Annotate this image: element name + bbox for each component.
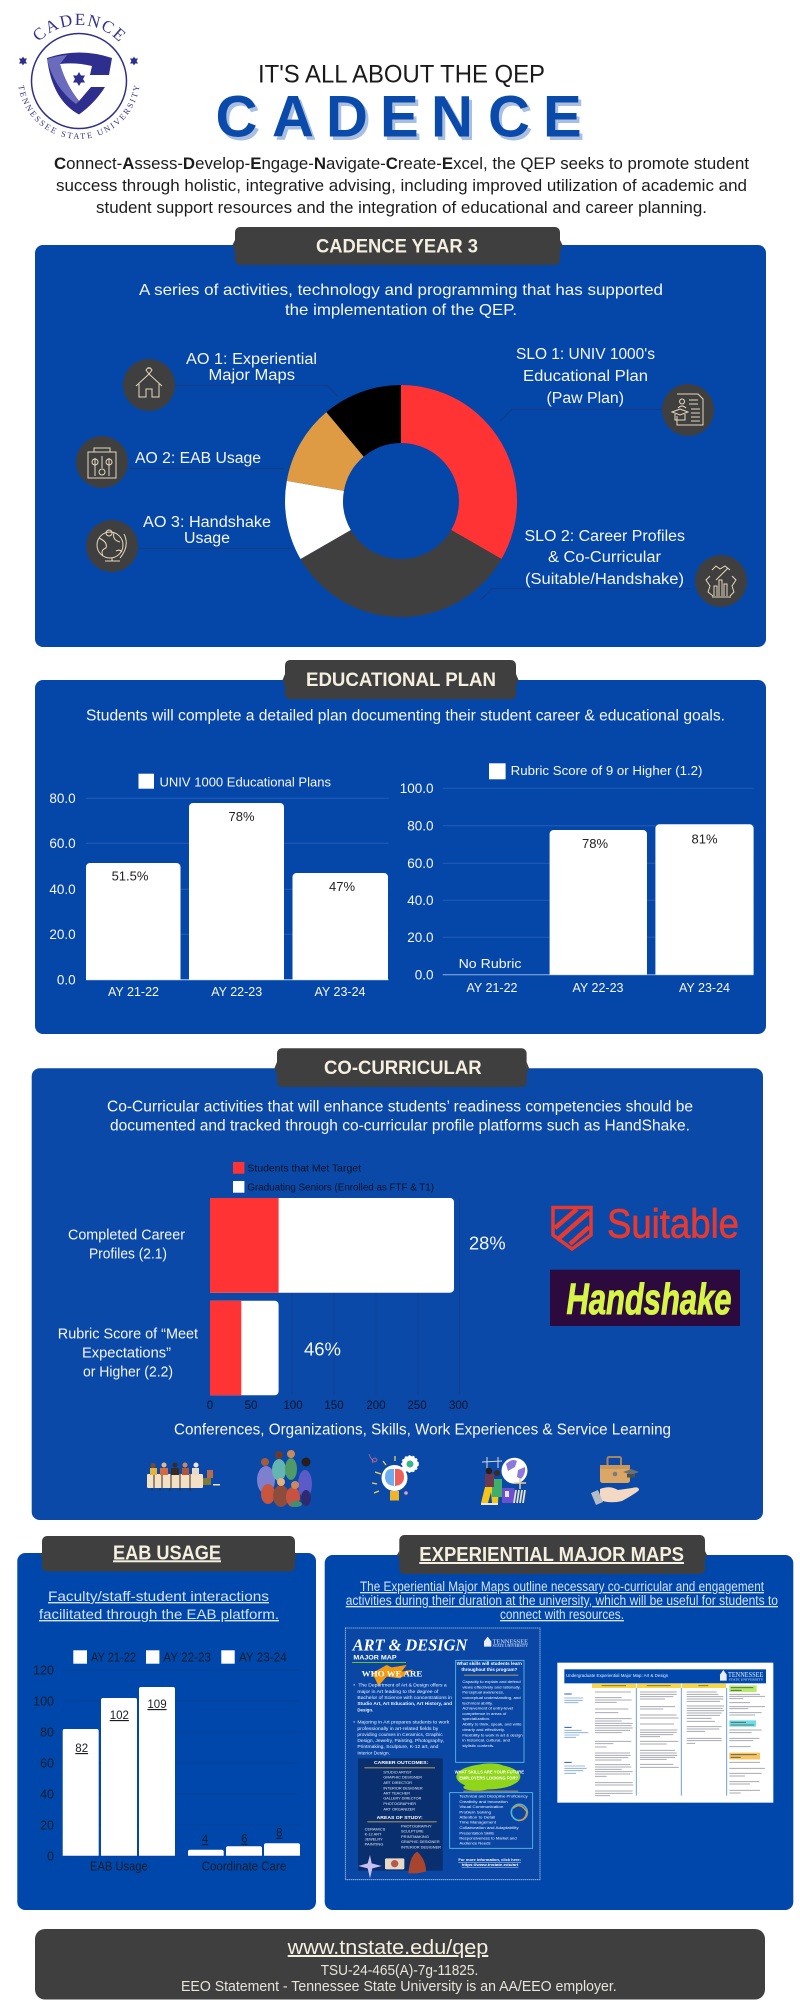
chart: EAB usage bars: 20 <box>40 1818 54 1832</box>
chart: EAB usage bars: AY 23-24 <box>239 1650 287 1664</box>
footer: website and EEO statement <box>35 1929 765 2000</box>
poster: Art and Design major map: K-12 ART <box>365 1832 382 1836</box>
icon: house <box>123 359 175 411</box>
panel: Educational Plan <box>35 660 766 1034</box>
chart: career profiles and rubric score bars: or Higher (2.2) <box>83 1364 173 1381</box>
poster: Art and Design major map: Printmaking, Sculpture, K-12 art, and <box>357 1744 439 1749</box>
intro paragraph: student support resources and the integration of educational and career planning. <box>96 199 707 217</box>
text: major maps description: connect with resources. <box>500 1607 624 1622</box>
chart: EAB usage bars: EAB Usage <box>90 1860 148 1874</box>
poster: Art and Design major map: conceptual understanding, and <box>462 1695 521 1700</box>
poster: Art and Design major map: AREAS OF STUDY: <box>377 1815 423 1820</box>
legend: Students that Met Target <box>247 1164 361 1175</box>
chart: Rubric Score of 9 or Higher: 0.0 <box>415 967 434 982</box>
label: SLO 2 Career Profiles and Co-Curricular: SLO 2: Career Profiles <box>524 528 685 545</box>
poster: Art and Design major map: Visual Communication <box>459 1804 503 1809</box>
poster: Art and Design major map: PHOTOGRAPHY <box>401 1824 432 1828</box>
chart: EAB usage bars: 40 <box>40 1788 54 1802</box>
poster: Art and Design major map: Creativity and Innovation <box>459 1799 508 1804</box>
poster: Art and Design major map: ART ORGANIZER <box>383 1807 415 1811</box>
chart: career profiles and rubric score bars: 0 <box>207 1400 213 1412</box>
poster: Art and Design major map: Attention to Detail <box>459 1814 495 1819</box>
poster: Art and Design major map: WHO WE ARE <box>362 1669 423 1679</box>
icon: world travel and books <box>481 1457 528 1505</box>
chart: UNIV 1000 Educational Plans: UNIV 1000 Educational Plans <box>160 774 331 789</box>
chart: EAB usage bars: 100 <box>33 1694 54 1708</box>
icon: lightbulb brain and gear <box>369 1454 418 1500</box>
chart: Rubric Score of 9 or Higher <box>400 763 754 995</box>
poster: Art and Design major map: clearly and effectively. <box>462 1727 505 1732</box>
logo: Handshake: Handshake <box>566 1275 732 1324</box>
document: undergraduate experiential major map <box>557 1663 773 1803</box>
chart: EAB usage bars: 6 <box>241 1834 248 1846</box>
chart: EAB usage bars: 60 <box>40 1756 54 1770</box>
title: CADENCE wordmark: CADENCE <box>216 84 582 150</box>
poster: Art and Design major map: CERAMICS <box>365 1827 386 1831</box>
chart: Rubric Score of 9 or Higher: 100.0 <box>400 781 434 796</box>
chart: UNIV 1000 Educational Plans: AY 22-23 <box>211 985 262 999</box>
poster: Art and Design major map: Responsiveness to Market and <box>459 1836 517 1841</box>
heading: Educational Plan: EDUCATIONAL PLAN <box>306 670 496 691</box>
icon: conference audience <box>147 1462 220 1491</box>
chart: EAB usage bars: 80 <box>40 1726 54 1740</box>
chart: career profiles and rubric score bars: Completed Career <box>68 1227 185 1244</box>
text: educational plan description: Students will complete a detailed plan documenting their student career & educational goals. <box>86 708 725 724</box>
poster: Art and Design major map: Design. <box>357 1707 373 1712</box>
chart: Rubric Score of 9 or Higher: AY 21-22 <box>467 981 518 995</box>
poster: Art and Design major map: Time Management <box>459 1820 497 1825</box>
label: AO 3 Handshake Usage <box>138 514 290 548</box>
label: SLO 2 Career Profiles and Co-Curricular: (Suitable/Handshake) <box>525 571 684 588</box>
label: AO 1 Experiential Major Maps: Major Maps <box>208 367 295 384</box>
logo: Suitable <box>553 1200 739 1249</box>
poster: Art and Design major map: INTERIOR DESIGNER <box>383 1786 423 1790</box>
poster: Art and Design major map: JEWELRY <box>365 1838 383 1842</box>
poster: Art and Design major map: INTERIOR DESIGNER <box>401 1845 441 1849</box>
chart: Rubric Score of 9 or Higher: 78% <box>582 836 608 851</box>
poster: Art and Design major map: Majoring in Art prepares students to work <box>357 1720 450 1725</box>
poster: Art and Design major map: ART DIRECTOR <box>383 1781 412 1785</box>
label: AO 3 Handshake Usage: AO 3: Handshake <box>143 514 271 531</box>
intro paragraph: success through holistic, integrative advising, including improved utilization of academic and <box>56 177 747 195</box>
footer: website and EEO statement: EEO Statement - Tennessee State University is an AA/EEO employer. <box>181 1979 617 1995</box>
title: CADENCE wordmark: CADENCE <box>218 88 585 153</box>
chart: career profiles and rubric score bars: 50 <box>245 1400 257 1412</box>
label: SLO 2 Career Profiles and Co-Curricular <box>480 528 690 600</box>
poster: Art and Design major map: stylistic contexts. <box>462 1743 494 1748</box>
chart: UNIV 1000 Educational Plans: 78% <box>228 809 255 824</box>
chart: UNIV 1000 Educational Plans: 60.0 <box>49 836 76 851</box>
panel: Cadence Year 3 <box>35 227 766 647</box>
poster: Art and Design major map: competence in areas of <box>462 1711 507 1716</box>
poster: Art and Design major map: Technical and Discipline Proficiency <box>459 1794 528 1799</box>
poster: Art and Design major map: Flexibility to work in art & design <box>462 1732 523 1737</box>
logo: CADENCE Tennessee State University seal: TENNESSEE STATE UNIVERSITY <box>18 84 140 139</box>
chart: EAB usage bars: AY 21-22 <box>91 1650 136 1664</box>
chart: EAB usage bars: 102 <box>110 1710 129 1722</box>
chart: Rubric Score of 9 or Higher: No Rubric <box>459 956 522 971</box>
chart: Rubric Score of 9 or Higher: 81% <box>691 831 718 846</box>
poster: Art and Design major map: The Department of Art & Design offers a <box>358 1683 447 1688</box>
chart: UNIV 1000 Educational Plans <box>49 774 388 999</box>
chart: UNIV 1000 Educational Plans: 47% <box>329 879 355 894</box>
text: panel description <box>139 282 663 319</box>
legend <box>233 1162 434 1194</box>
text: major maps description <box>346 1579 778 1622</box>
heading: Experiential Major Maps <box>397 1535 707 1574</box>
heading: Cadence Year 3 <box>232 227 562 265</box>
chart: EAB usage bars: 0 <box>47 1850 54 1864</box>
poster: Art and Design major map: Ability to think, speak, and write <box>462 1722 522 1727</box>
chart: career profiles and rubric score bars <box>58 1162 506 1412</box>
poster: Art and Design major map: CAREER OUTCOMES: <box>374 1760 429 1765</box>
poster: Art and Design major map: views effectively and rationally. <box>462 1684 521 1689</box>
poster: Art and Design major map: STATE UNIVERSITY <box>493 1643 528 1648</box>
legend: Graduating Seniors (Enrolled as FTF & T1) <box>247 1182 434 1194</box>
document: undergraduate experiential major map: Undergraduate Experiential Major Map: Art & Design <box>566 1673 669 1678</box>
chart: Rubric Score of 9 or Higher: Rubric Score of 9 or Higher (1.2) <box>511 763 702 778</box>
chart: EAB usage bars: AY 22-23 <box>163 1650 211 1664</box>
icon: group of students <box>257 1450 312 1507</box>
poster: Art and Design major map: PAINTING <box>365 1843 383 1847</box>
poster: Art and Design major map: GRAPHIC DESIGNER <box>401 1840 440 1844</box>
poster: Art and Design major map: WHAT SKILLS ARE YOUR FUTURE <box>455 1770 524 1775</box>
label: SLO 1 Educational Plan: (Paw Plan) <box>546 390 624 407</box>
text: EAB description: facilitated through the EAB platform. <box>39 1606 279 1622</box>
poster: Art and Design major map: https://www.tnstate.edu/art <box>462 1862 519 1867</box>
heading: Co-Curricular: CO-CURRICULAR <box>324 1058 482 1079</box>
poster: Art and Design major map: TENNESSEE <box>493 1638 528 1645</box>
chart: career profiles and rubric score bars: 28% <box>469 1233 506 1253</box>
chart: career profiles and rubric score bars: Expectations” <box>82 1345 171 1362</box>
icon: gear with bar chart <box>695 555 747 607</box>
chart: EAB usage bars: 82 <box>75 1743 88 1755</box>
logo: CADENCE Tennessee State University seal: CADENCE <box>34 14 126 42</box>
chart: UNIV 1000 Educational Plans: AY 21-22 <box>108 985 159 999</box>
text: EAB description <box>39 1588 279 1622</box>
chart: donut of outcomes <box>285 385 517 617</box>
chart: UNIV 1000 Educational Plans: 40.0 <box>49 882 76 897</box>
text: panel description: A series of activities, technology and programming that has supported <box>139 282 663 299</box>
heading: Co-Curricular <box>274 1048 529 1087</box>
label: AO 1 Experiential Major Maps <box>172 351 338 397</box>
chart: career profiles and rubric score bars: 46% <box>304 1340 341 1360</box>
footer: website and EEO statement: TSU-24-465(A)-7g-11825. <box>321 1963 478 1979</box>
heading: EAB Usage <box>40 1536 297 1572</box>
icon: globe <box>86 520 138 572</box>
poster: Art and Design major map: professionally in art-related fields by <box>357 1726 439 1731</box>
poster: Art and Design major map: technical ability. <box>462 1700 493 1705</box>
text: EAB description: Faculty/staff-student interactions <box>48 1588 269 1604</box>
poster: Art and Design major map: PHOTOGRAPHER <box>383 1802 416 1806</box>
poster: Art and Design major map: Capacity to explain and defend <box>462 1679 521 1684</box>
text: activities caption: Conferences, Organizations, Skills, Work Experiences & Service Learning <box>174 1422 671 1438</box>
chart: Rubric Score of 9 or Higher: 40.0 <box>407 893 434 908</box>
label: SLO 1 Educational Plan: SLO 1: UNIV 1000's <box>516 346 655 363</box>
chart: career profiles and rubric score bars: 150 <box>324 1400 344 1412</box>
chart: career profiles and rubric score bars: 250 <box>407 1400 427 1412</box>
intro paragraph <box>54 155 749 217</box>
poster: Art and Design major map: PRINTMAKING <box>401 1835 429 1839</box>
poster: Art and Design major map: Studio Art, Art Education, Art History, and <box>357 1701 452 1706</box>
poster: Art and Design major map: in historical, cultural, and <box>462 1738 510 1743</box>
poster: Art and Design major map: SCULPTURE <box>401 1830 424 1834</box>
chart: EAB usage bars: 8 <box>276 1828 283 1840</box>
poster: Art and Design major map: GALLERY DIRECTOR <box>383 1797 422 1801</box>
chart: Rubric Score of 9 or Higher: AY 22-23 <box>573 981 624 995</box>
chart: career profiles and rubric score bars: Rubric Score of “Meet <box>58 1326 199 1343</box>
title: It's all about the QEP: IT'S ALL ABOUT THE QEP <box>258 60 545 88</box>
chart: career profiles and rubric score bars: 200 <box>366 1400 386 1412</box>
label: SLO 2 Career Profiles and Co-Curricular: & Co-Curricular <box>548 549 661 566</box>
chart: UNIV 1000 Educational Plans: 51.5% <box>112 868 149 883</box>
poster: Art and Design major map: Interior Design. <box>357 1750 390 1755</box>
label: SLO 1 Educational Plan <box>500 346 665 421</box>
heading: Experiential Major Maps: EXPERIENTIAL MAJOR MAPS <box>419 1544 684 1566</box>
text: co-curricular description: documented and tracked through co-curricular profile platforms such as HandShake. <box>110 1118 690 1134</box>
chart: UNIV 1000 Educational Plans: AY 23-24 <box>315 985 366 999</box>
poster: Art and Design major map: providing courses in Ceramics, Graphic <box>357 1732 444 1737</box>
chart: UNIV 1000 Educational Plans: 20.0 <box>49 927 76 942</box>
text: panel description: the implementation of the QEP. <box>285 302 517 319</box>
label: AO 2 EAB Usage: AO 2: EAB Usage <box>135 450 261 467</box>
poster: Art and Design major map: STUDIO ARTIST <box>383 1770 413 1774</box>
heading: Educational Plan <box>282 660 518 699</box>
poster: Art and Design major map: • <box>353 1683 355 1688</box>
intro paragraph: Connect-Assess-Develop-Engage-Navigate-Create-Excel, the QEP seeks to promote student <box>54 155 749 173</box>
chart: career profiles and rubric score bars: 300 <box>449 1400 468 1412</box>
document: undergraduate experiential major map: TENNESSEE <box>728 1670 764 1679</box>
label: SLO 1 Educational Plan: Educational Plan <box>523 368 648 385</box>
icon: document with graduation cap <box>662 384 714 436</box>
poster: Art and Design major map: Audience Needs <box>459 1841 491 1846</box>
text: co-curricular description <box>107 1098 693 1134</box>
poster: Art and Design major map: What skills will students learn <box>457 1661 522 1666</box>
icon: briefcase in hand <box>591 1457 639 1505</box>
panel: EAB Usage <box>17 1536 316 1910</box>
label: AO 1 Experiential Major Maps: AO 1: Experiential <box>186 351 317 368</box>
poster: Art and Design major map: Presentation Skills <box>459 1830 494 1835</box>
poster: Art and Design major map <box>345 1628 540 1880</box>
logo: CADENCE Tennessee State University seal <box>18 14 140 139</box>
chart: EAB usage bars: 120 <box>33 1664 54 1678</box>
chart: EAB usage bars: 4 <box>202 1834 209 1846</box>
poster: Art and Design major map: major in Art leading to the degree of <box>357 1689 439 1694</box>
poster: Art and Design major map: GRAPHIC DESIGNER <box>383 1776 422 1780</box>
poster: Art and Design major map: Problem Solving <box>459 1809 491 1814</box>
poster: Art and Design major map: Perceptual awareness, <box>462 1690 504 1695</box>
poster: Art and Design major map: Design, Jewelry, Painting, Photography, <box>357 1738 444 1743</box>
document: undergraduate experiential major map: STATE UNIVERSITY <box>729 1678 764 1682</box>
poster: Art and Design major map: For more information, click here: <box>458 1857 521 1862</box>
label: AO 3 Handshake Usage: Usage <box>184 530 230 547</box>
chart: UNIV 1000 Educational Plans: 80.0 <box>49 791 76 806</box>
chart: Rubric Score of 9 or Higher: 60.0 <box>407 856 434 871</box>
poster: Art and Design major map: MAJOR MAP <box>353 1655 397 1662</box>
poster: Art and Design major map: specialization. <box>462 1716 490 1721</box>
poster: Art and Design major map: ART TEACHER <box>383 1792 410 1796</box>
panel: Co-Curricular <box>32 1048 763 1520</box>
icon: control panel <box>76 436 128 488</box>
heading: Cadence Year 3: CADENCE YEAR 3 <box>316 236 478 258</box>
footer: website and EEO statement: www.tnstate.edu/qep <box>287 1937 488 1959</box>
chart: Rubric Score of 9 or Higher: AY 23-24 <box>679 981 730 995</box>
chart: EAB usage bars: 109 <box>147 1699 167 1711</box>
logo: Handshake <box>550 1270 740 1326</box>
chart: UNIV 1000 Educational Plans: 0.0 <box>57 972 76 987</box>
logo: Suitable: Suitable <box>607 1200 739 1246</box>
poster: Art and Design major map: Bachelor of Science with concentrations in <box>357 1695 453 1700</box>
poster: Art and Design major map: Collaboration and Adaptability <box>459 1825 519 1830</box>
poster: Art and Design major map: Achievement of entry-level <box>462 1706 513 1711</box>
chart: Rubric Score of 9 or Higher: 80.0 <box>407 818 434 833</box>
chart: EAB usage bars <box>33 1650 300 1874</box>
text: co-curricular description: Co-Curricular activities that will enhance students’ readiness competencies should be <box>107 1098 693 1116</box>
chart: Rubric Score of 9 or Higher: 20.0 <box>407 930 434 945</box>
chart: career profiles and rubric score bars: 100 <box>283 1400 303 1412</box>
poster: Art and Design major map: EMPLOYERS LOOKING FOR? <box>459 1775 518 1780</box>
chart: career profiles and rubric score bars: Profiles (2.1) <box>89 1246 167 1263</box>
panel: Experiential Major Maps <box>325 1535 793 1910</box>
chart: EAB usage bars: Coordinate Care <box>202 1860 286 1874</box>
poster: Art and Design major map: • <box>353 1720 355 1725</box>
poster: Art and Design major map: throughout this program? <box>461 1667 518 1672</box>
heading: EAB Usage: EAB USAGE <box>113 1542 221 1564</box>
poster: Art and Design major map: ART & DESIGN <box>352 1636 468 1655</box>
